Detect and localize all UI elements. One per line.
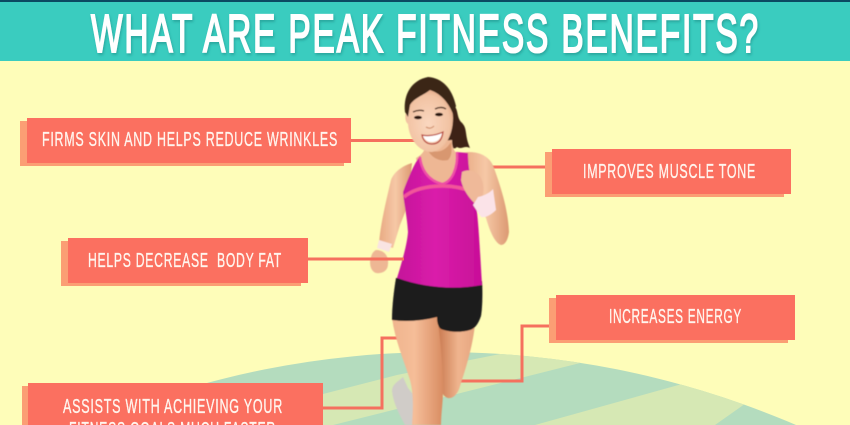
shoe [392,377,416,425]
front leg [392,316,443,425]
runner photo illustration [370,77,509,425]
lips [422,132,443,144]
neckline trim [420,152,457,184]
box: increases energy [549,295,795,343]
neck and chest [416,140,463,187]
eyes [414,113,443,119]
arm right [462,152,509,245]
box: increases energy: INCREASES ENERGY [609,306,742,328]
header band [0,0,850,61]
box: helps decrease body fat [61,238,308,286]
neck shadow [426,142,452,160]
ponytail [445,104,470,148]
hand left [370,250,388,273]
box: improves muscle tone [545,149,791,197]
smile [423,132,442,142]
box: firms skin [20,118,351,166]
connector lines behind the runner [323,140,556,408]
chest band [404,186,473,197]
striped green hill [207,352,796,425]
wristband left [377,240,392,252]
box: assists with fitness goals: ASSISTS WITH ACHIEVING YOUR [63,396,283,418]
back leg [438,324,475,398]
tank top [397,152,482,288]
connector: body fat [308,258,404,260]
box: assists with fitness goals [22,383,323,425]
fist [461,170,483,206]
face [405,89,453,152]
nose [426,126,434,128]
eyebrows [413,108,446,112]
box: firms skin: FIRMS SKIN AND HELPS REDUCE WRINKLES [42,129,338,151]
arm left [379,163,412,248]
box: helps decrease body fat: HELPS DECREASE BODY FAT [88,250,282,272]
wristband right [473,189,496,217]
hair [405,77,456,117]
shorts [392,278,482,332]
